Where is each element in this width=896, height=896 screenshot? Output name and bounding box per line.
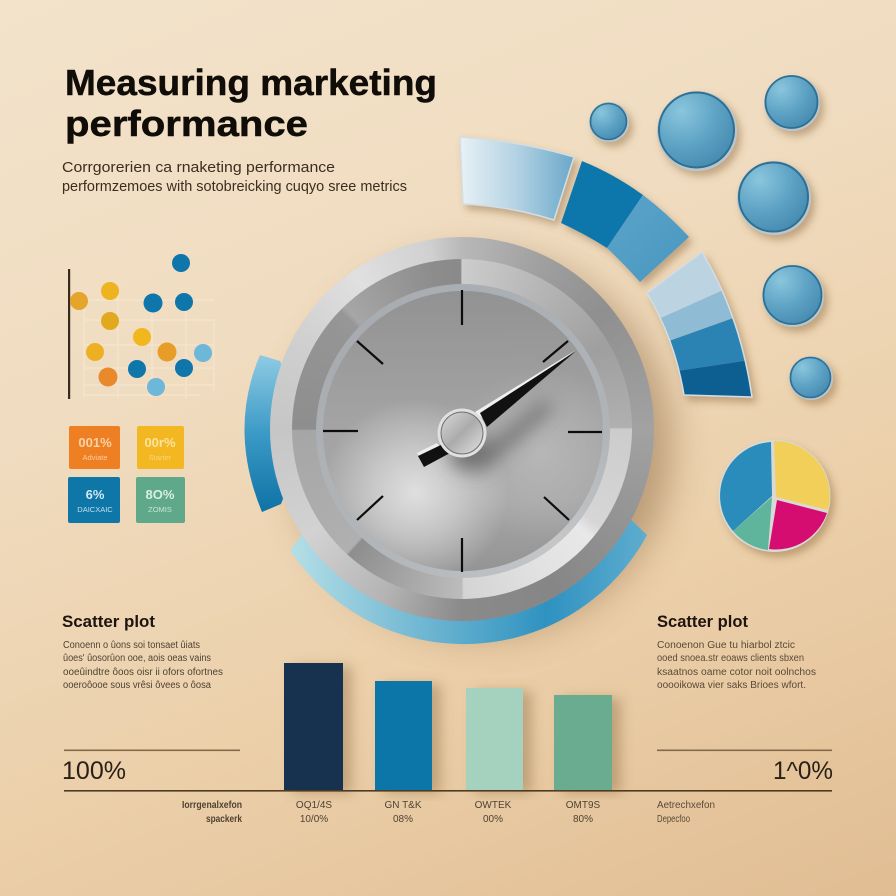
- pie chart: [718, 440, 830, 552]
- left axis label: [182, 800, 242, 825]
- dial face: [323, 291, 603, 571]
- tile: orange: Adviate: [82, 453, 108, 462]
- tile: green: 8O%: [146, 487, 175, 502]
- right caption: [657, 613, 816, 691]
- right axis label: Aetrechxefon: [657, 800, 715, 811]
- left caption body: ûoes' ûosorûon ooe, aois oeas vains: [63, 653, 211, 664]
- tile: blue: [68, 477, 120, 523]
- bar: green: [554, 695, 612, 790]
- dial ticks and needle: [323, 290, 602, 572]
- tile: green: [136, 477, 185, 523]
- stacked arc segment: [646, 251, 760, 407]
- bar labels: 80%: [573, 814, 593, 825]
- stat tiles: [68, 426, 185, 523]
- right axis label: Depecfoo: [657, 814, 690, 825]
- right caption heading: Scatter plot: [657, 613, 748, 631]
- top arc gauge segments: [460, 137, 689, 282]
- tile: blue: DAICXAIC: [77, 505, 113, 514]
- left caption body: ooeûindtre ôoos oisr ii ofors ofortnes: [63, 667, 223, 678]
- bar labels: 08%: [393, 814, 413, 825]
- needle shadow: [449, 400, 553, 472]
- scatter plot: [68, 254, 214, 399]
- bar chart: [64, 663, 832, 825]
- bar labels: [296, 800, 601, 825]
- right stat 1^0%: 1^0%: [773, 757, 833, 785]
- left axis label: spackerk: [206, 814, 242, 825]
- right caption body: ksaatnos oame cotor noit oolnchos: [657, 667, 816, 678]
- left caption: [62, 613, 223, 691]
- tile: blue: 6%: [86, 487, 105, 502]
- baseline axis: [64, 790, 832, 792]
- segment: dark blue: [561, 161, 643, 248]
- subtitle: Corrgorerien ca rnaketing performance: [62, 160, 335, 176]
- left blue arc: [244, 355, 310, 512]
- title: [65, 62, 437, 144]
- tile: green: ZOMIS: [148, 505, 172, 514]
- left caption body: Conoenn o ûons soi tonsaet ûiats: [63, 640, 200, 651]
- right caption body: ooooikowa vier saks Brioes wfort.: [657, 680, 806, 691]
- left axis label: Iorrgenalxefon: [182, 800, 242, 811]
- scatter axis: [68, 269, 70, 399]
- dial bevel ring: [292, 259, 632, 599]
- bottom blue arc: [290, 490, 647, 644]
- bar: blue: [375, 681, 432, 790]
- needle hub: [438, 408, 486, 458]
- scatter dots: [70, 254, 212, 396]
- right caption body: ooed snoea.str eoaws clients sbxen: [657, 653, 804, 664]
- left caption body: ooeroôooe sous vrêsi ôvees o ôosa: [63, 680, 211, 691]
- tile: orange: [69, 426, 120, 469]
- hour ticks: [323, 290, 602, 572]
- subtitle: performzemoes with sotobreicking cuqyo sree metrics: [62, 179, 407, 195]
- left stat 100%: 100%: [62, 757, 126, 785]
- title: Measuring marketing: [65, 62, 437, 103]
- tile: yellow: [137, 426, 184, 469]
- bar labels: 10/0%: [300, 814, 328, 825]
- bar labels: GN T&K: [384, 800, 422, 811]
- bar: navy: [284, 663, 343, 790]
- bar labels: 00%: [483, 814, 503, 825]
- segment: mid blue: [607, 195, 689, 282]
- title: performance: [65, 103, 308, 144]
- tile: yellow: Starter: [149, 453, 172, 462]
- gauge dial: [270, 237, 654, 621]
- tile: orange: 001%: [78, 435, 112, 450]
- dial inner rim: [316, 284, 610, 578]
- right caption body: [657, 640, 816, 691]
- bar labels: OQ1/4S: [296, 800, 332, 811]
- needle: [417, 350, 576, 467]
- left caption heading: Scatter plot: [62, 613, 156, 631]
- right caption body: Conoenon Gue tu hiarbol ztcic: [657, 640, 795, 651]
- tile: yellow: 00r%: [144, 435, 176, 450]
- blue bubbles: [589, 75, 833, 400]
- bar: mint: [466, 688, 523, 790]
- bar labels: OWTEK: [475, 800, 512, 811]
- segment: pale blue: [460, 137, 574, 220]
- subtitle: [62, 160, 407, 195]
- bar labels: OMT9S: [566, 800, 601, 811]
- right axis label: [657, 800, 715, 825]
- left caption body: [63, 640, 223, 691]
